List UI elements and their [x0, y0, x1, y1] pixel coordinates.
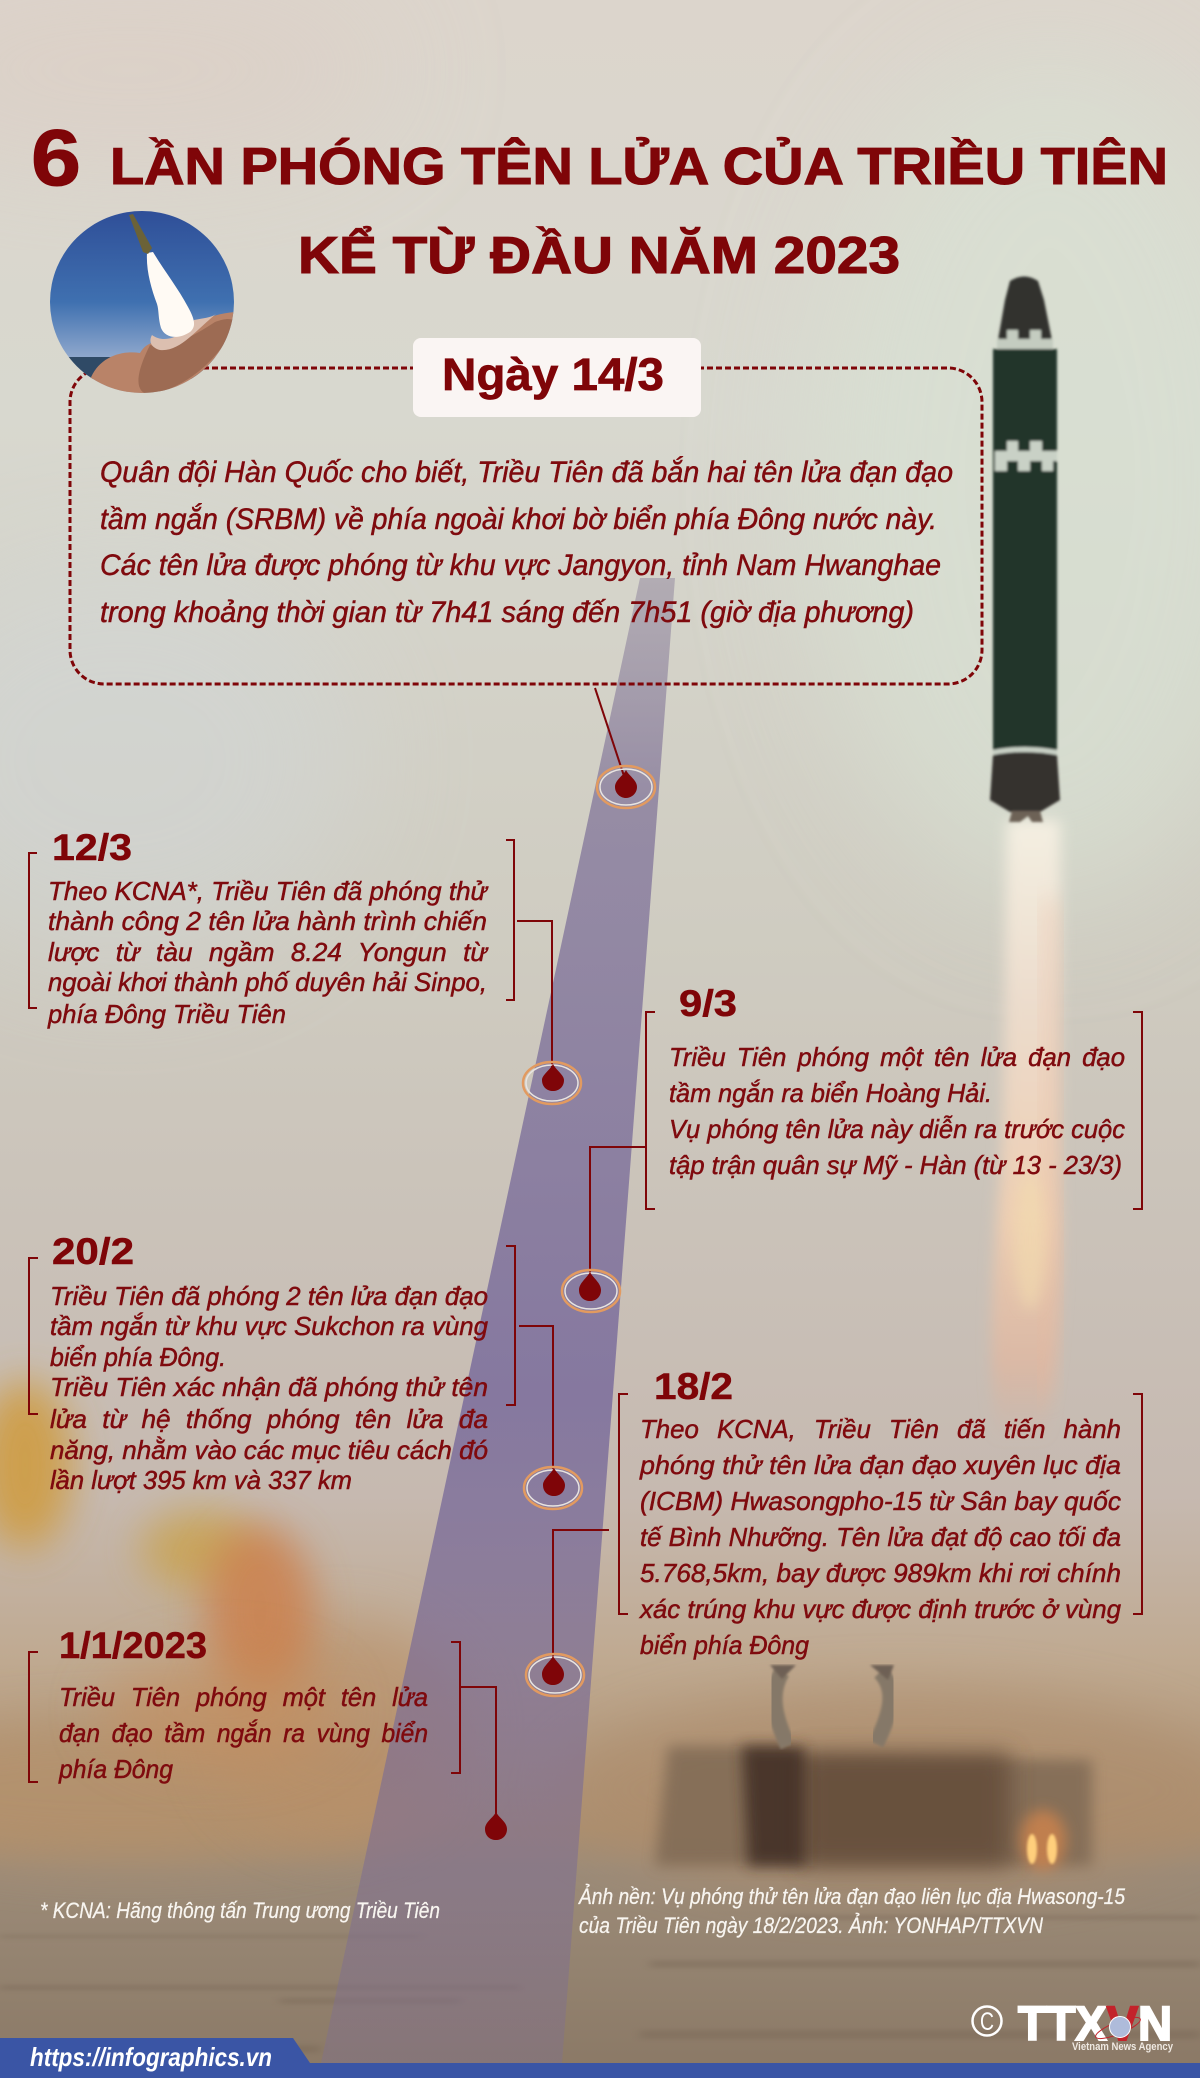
- event: 18/2: xác trúng khu vực được định trước ở vùng: [638, 1594, 1122, 1624]
- event: 18/2: 18/2: [654, 1366, 733, 1407]
- text: 14/3 description: trong khoảng thời gian từ 7h41 sáng đến 7h51 (giờ địa phương): [100, 596, 914, 629]
- event: 18/2: (ICBM) Hwasongpho-15 từ Sân bay quốc: [640, 1486, 1121, 1516]
- event: 20/2: 20/2: [52, 1231, 134, 1272]
- event: 12/3: Theo KCNA*, Triều Tiên đã phóng thử: [48, 876, 489, 906]
- event: 12/3: phía Đông Triều Tiên: [47, 999, 286, 1029]
- footer bar with url: https://infographics.vn: [30, 2042, 272, 2072]
- photo caption: của Triều Tiên ngày 18/2/2023. Ảnh: YONHAP/TTXVN: [579, 1913, 1043, 1938]
- event: 12/3: thành công 2 tên lửa hành trình chiến: [48, 906, 487, 936]
- event: 1/1/2023: [29, 1625, 460, 1784]
- event: 12/3: [29, 827, 514, 1029]
- launch vehicle in dust: [560, 1665, 1200, 1890]
- text: 14/3 description: Quân đội Hàn Quốc cho biết, Triều Tiên đã bắn hai tên lửa đạn đạo: [100, 456, 953, 489]
- event: 18/2: 5.768,5km, bay được 989km khi rơi chính: [640, 1558, 1121, 1588]
- event: 20/2: Triều Tiên đã phóng 2 tên lửa đạn đạo: [50, 1281, 488, 1311]
- event: 20/2: lần lượt 395 km và 337 km: [50, 1465, 352, 1495]
- logo: TTXVN: Vietnam News Agency: [1072, 2041, 1174, 2053]
- panel: 14/3 dashed box: [70, 338, 982, 684]
- connector: 12/3 to marker: [517, 921, 552, 1068]
- photo caption: [577, 1884, 1126, 1938]
- missile: [990, 276, 1060, 822]
- orange smoke clouds: [0, 1380, 470, 1860]
- text: 14/3 description: tầm ngắn (SRBM) về phía ngoài khơi bờ biển phía Đông nước này.: [100, 503, 937, 536]
- text: 14/3 description: [100, 456, 953, 629]
- event: 1/1/2023: đạn đạo tầm ngắn ra vùng biển: [59, 1718, 428, 1748]
- footer bar with url: [0, 2038, 1200, 2078]
- event: 9/3: Vụ phóng tên lửa này diễn ra trước cuộc: [669, 1114, 1125, 1144]
- logo: TTXVN: C: [980, 2008, 994, 2036]
- event: 18/2: Theo KCNA, Triều Tiên đã tiến hành: [640, 1414, 1121, 1444]
- footnote: KCNA: * KCNA: Hãng thông tấn Trung ương Triều Tiên: [40, 1898, 440, 1923]
- event: 1/1/2023: 1/1/2023: [59, 1625, 207, 1666]
- event: 9/3: Triều Tiên phóng một tên lửa đạn đạo: [669, 1042, 1125, 1072]
- connector: 14/3 to marker: [595, 688, 624, 776]
- event: 20/2: lửa từ hệ thống phóng tên lửa đa: [50, 1404, 488, 1434]
- title: [31, 113, 1168, 285]
- event: 20/2: Triều Tiên xác nhận đã phóng thử tên: [50, 1372, 488, 1402]
- marker: 9/3: [562, 1270, 620, 1312]
- marker: 1/1/2023: [485, 1812, 507, 1840]
- purple trajectory beam: [321, 578, 675, 2063]
- photo: short range missile launch: [50, 211, 238, 400]
- event: 18/2: phóng thử tên lửa đạn đạo xuyên lục địa: [639, 1450, 1121, 1480]
- event: 20/2: tầm ngắn từ khu vực Sukchon ra vùng: [50, 1311, 489, 1341]
- event: 9/3: [646, 983, 1142, 1209]
- title: 6: [31, 113, 81, 202]
- date tag: Ngày 14/3: Ngày 14/3: [442, 349, 664, 400]
- connector: 9/3 to marker: [590, 1147, 645, 1274]
- marker: 12/3: [523, 1062, 581, 1104]
- event: 12/3: ngoài khơi thành phố duyên hải Sinpo,: [48, 967, 487, 997]
- event: 20/2: năng, nhằm vào các mục tiêu cách đó: [50, 1435, 488, 1465]
- connector: 1/1/2023 to marker: [460, 1687, 496, 1816]
- ground streaks: [0, 1915, 1200, 2053]
- marker: 20/2: [524, 1467, 582, 1509]
- photo caption: Ảnh nền: Vụ phóng thử tên lửa đạn đạo liên lục địa Hwasong-15: [577, 1884, 1126, 1909]
- marker: 18/2: [526, 1654, 584, 1696]
- event: 9/3: tập trận quân sự Mỹ - Hàn (từ 13 - 23/3): [669, 1150, 1122, 1180]
- date tag: Ngày 14/3: [413, 338, 701, 417]
- event: 20/2: biển phía Đông.: [50, 1342, 226, 1372]
- title: KỂ TỪ ĐẦU NĂM 2023: [298, 226, 900, 285]
- connector: 20/2 to marker: [519, 1326, 553, 1472]
- event: 18/2: [619, 1366, 1142, 1660]
- event: 9/3: 9/3: [679, 983, 737, 1024]
- event: 18/2: biển phía Đông: [640, 1630, 810, 1660]
- marker: 14/3: [597, 766, 655, 808]
- title: LẦN PHÓNG TÊN LỬA CỦA TRIỀU TIÊN: [110, 137, 1168, 196]
- event: 1/1/2023: Triều Tiên phóng một tên lửa: [59, 1682, 428, 1712]
- event: 18/2: tế Bình Nhưỡng. Tên lửa đạt độ cao tối đa: [640, 1522, 1121, 1552]
- event: 12/3: lược từ tàu ngầm 8.24 Yongun từ: [48, 937, 489, 967]
- event: 20/2: [29, 1231, 515, 1495]
- event: 12/3: 12/3: [52, 827, 132, 868]
- event: 1/1/2023: phía Đông: [58, 1754, 174, 1784]
- event: 9/3: tầm ngắn ra biển Hoàng Hải.: [669, 1078, 992, 1108]
- text: 14/3 description: Các tên lửa được phóng từ khu vực Jangyon, tỉnh Nam Hwanghae: [100, 549, 941, 582]
- logo: TTXVN: TTXVN: [1018, 1998, 1172, 2051]
- connector: 18/2 to marker: [553, 1530, 609, 1658]
- rocket exhaust flame: [992, 820, 1060, 1440]
